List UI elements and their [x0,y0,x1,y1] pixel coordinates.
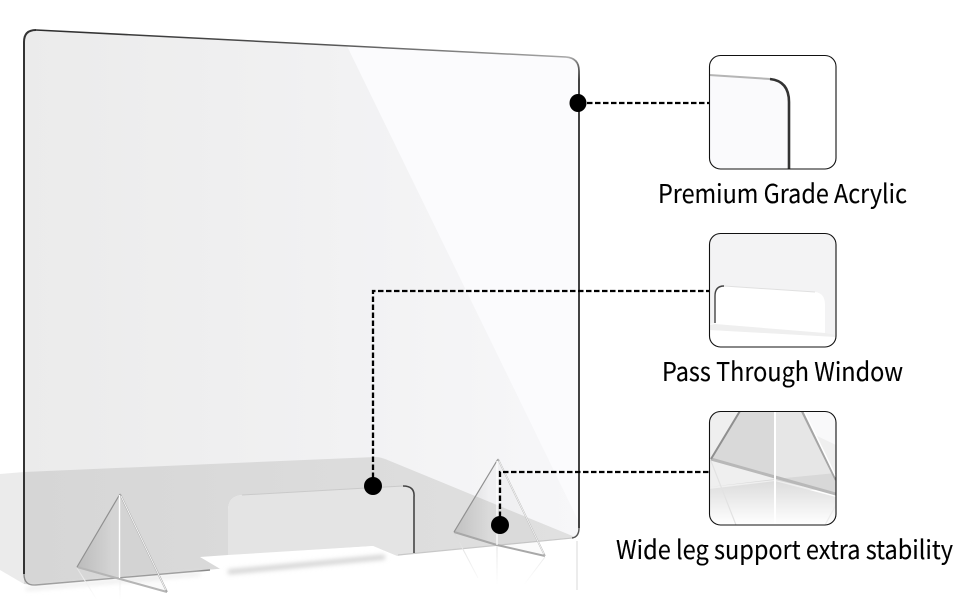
icon: left triangular leg [77,494,167,600]
detail inset: window [709,233,836,347]
floor reflection seen through the sheet [24,457,575,585]
sheet edges [24,30,36,574]
glare highlight [347,46,578,520]
label: pass through window: Pass Through Window [662,352,903,389]
window floor shadow [228,557,385,572]
icon: right triangular leg [454,459,545,590]
edge reflections on floor [26,574,200,589]
callout connector: wide leg support [491,472,709,534]
callout connector: premium grade acrylic [570,94,709,112]
detail inset: leg closeup [709,411,836,525]
sheet body [24,30,579,585]
label: premium grade acrylic: Premium Grade Acrylic [658,174,907,211]
panel: acrylic sheet [0,30,579,590]
window floor gap [200,546,397,578]
pass through window [228,486,415,556]
callout connector: pass through window [364,291,709,495]
detail inset: panel corner [709,55,836,169]
